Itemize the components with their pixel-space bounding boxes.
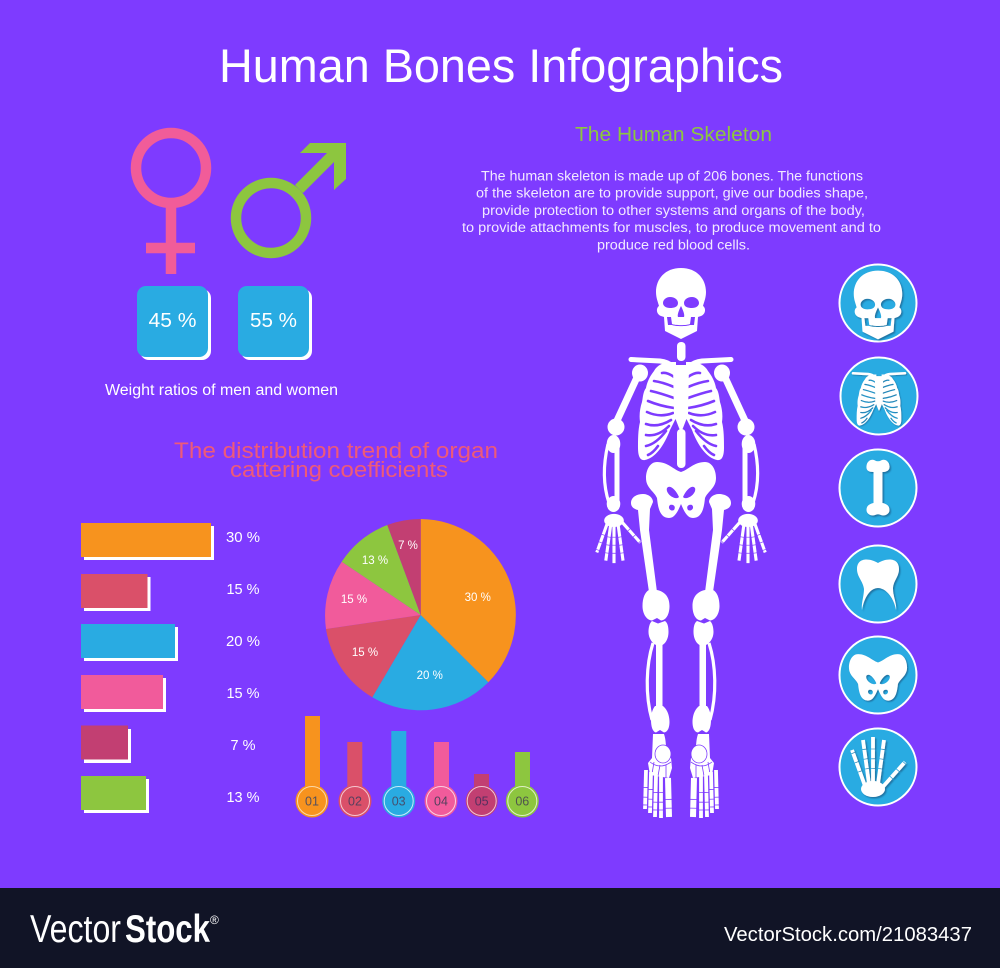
text block: skeleton description: The human skeleton is made up of 206 bones. The functions [481, 168, 863, 184]
stat box: 45 percent [137, 286, 211, 360]
footer bar: Stock [125, 908, 210, 951]
footer bar [0, 888, 1000, 968]
left leg [631, 494, 672, 818]
column 05 [466, 774, 498, 817]
pie chart: 7 % [398, 540, 418, 552]
bar: 13 percent: 13 % [226, 789, 260, 806]
bar: 15 percent red [81, 574, 260, 611]
pie chart: 15 % [341, 594, 367, 606]
column 02 [338, 742, 372, 818]
skeleton figure [597, 268, 765, 818]
caption: weight ratios: Weight ratios of men and women [105, 382, 338, 399]
left arm [597, 364, 648, 563]
icon: pelvis badge [840, 636, 916, 714]
heading: the human skeleton: The Human Skeleton [575, 124, 772, 146]
icon: male symbol [236, 143, 346, 253]
bar: 13 percent [81, 776, 260, 813]
bar: 15 percent pink: 15 % [226, 685, 260, 702]
icon: female symbol [136, 133, 206, 274]
text block: skeleton description: provide protection to other systems and organs of the body, [482, 203, 865, 218]
icon: skull badge [840, 264, 916, 342]
text block: skeleton description [462, 168, 881, 252]
bar: 20 percent [81, 624, 260, 661]
column 03 [382, 731, 415, 818]
bar: 7 percent [81, 726, 256, 763]
column 05: 05 [475, 794, 489, 808]
icon: bone badge [840, 450, 916, 526]
neck [677, 342, 686, 361]
icon: rib cage badge [840, 358, 918, 434]
text block: skeleton description: to provide attachments for muscles, to produce movement and to [462, 220, 881, 235]
heading: organ coefficients: cattering coefficients [230, 457, 448, 482]
pie chart: 13 % [362, 555, 388, 567]
bar: 20 percent: 20 % [226, 633, 260, 650]
column 04 [424, 742, 458, 818]
bar: 30 percent: 30 % [226, 529, 260, 546]
footer bar: VectorStock.com/21083437 [724, 924, 972, 946]
stat box: 45 percent: 45 % [148, 310, 197, 332]
column 06: 06 [515, 794, 529, 808]
bar: 15 percent pink [81, 675, 260, 712]
text block: skeleton description: produce red blood cells. [597, 238, 750, 252]
skull [656, 268, 706, 339]
icon: hand badge [840, 728, 916, 806]
column 03: 03 [392, 794, 406, 808]
column 01 [296, 716, 328, 818]
footer bar: ® [210, 913, 219, 927]
text block: skeleton description: of the skeleton are to provide support, give our bodies shape, [476, 186, 868, 200]
right leg [690, 494, 731, 818]
spine [677, 429, 686, 468]
column 01: 01 [305, 794, 319, 808]
pie chart: 20 % [417, 670, 443, 682]
stat box: 55 percent [238, 286, 312, 360]
column 02: 02 [348, 794, 362, 808]
title: Human Bones Infographics [219, 39, 783, 92]
pie chart: 30 % [465, 592, 491, 604]
column 06 [506, 752, 539, 818]
horizontal bar chart [81, 523, 260, 813]
pelvis [646, 462, 716, 518]
pie chart: 15 % [352, 647, 378, 659]
stat box: 55 percent: 55 % [250, 310, 297, 332]
footer bar: Vector [30, 908, 121, 951]
right arm [714, 364, 765, 563]
bar: 15 percent red: 15 % [226, 581, 260, 598]
column chart with numbered markers [296, 716, 539, 818]
heading: organ coefficients [174, 438, 498, 482]
bar: 30 percent [81, 523, 260, 560]
icon: tooth badge [840, 546, 916, 622]
pie chart [325, 519, 516, 710]
bar: 7 percent: 7 % [230, 737, 256, 754]
rib cage [631, 360, 731, 460]
heading: organ coefficients: The distribution trend of organ [174, 438, 498, 463]
column 04: 04 [434, 794, 448, 808]
